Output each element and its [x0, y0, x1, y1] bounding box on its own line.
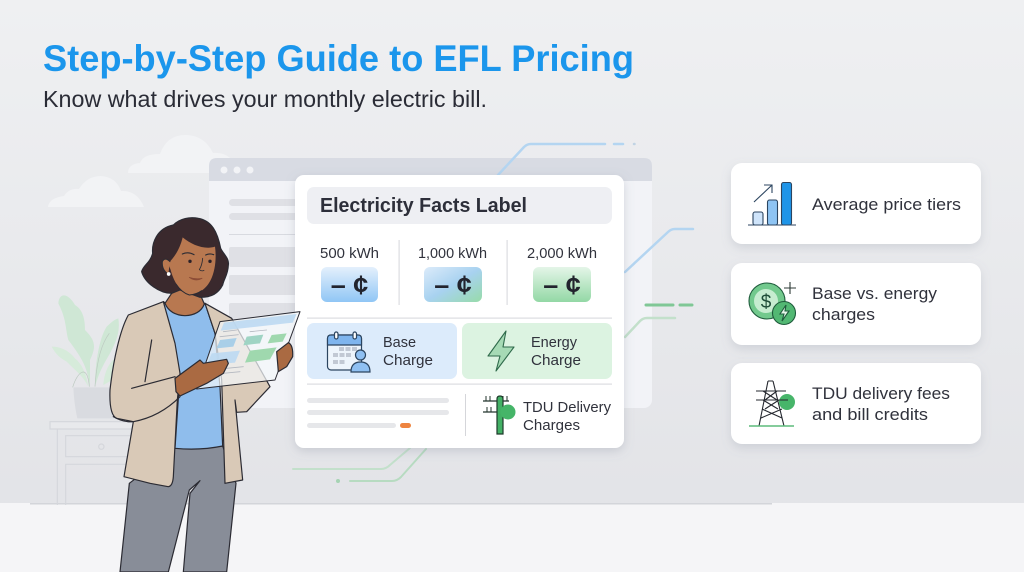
icon: coin with bolt: [749, 282, 796, 324]
tier: 1,000 kWh: 1,000 kWh: [418, 246, 487, 262]
tablet: [197, 312, 300, 389]
panel: Electricity Facts Label card: [295, 175, 624, 448]
placeholder lines: [307, 398, 449, 428]
tier: 2,000 kWh: – ¢: [543, 270, 581, 300]
person reading tablet: [110, 218, 300, 572]
icon: utility pole: [483, 396, 516, 434]
cardigan left: [110, 302, 180, 487]
icon: transmission tower: [749, 381, 795, 426]
card: TDU delivery fees and bill credits: [731, 363, 981, 444]
card: base vs energy charges: Base vs. energy: [812, 284, 938, 303]
TDU delivery charges: [483, 396, 612, 434]
tier: 1,000 kWh: [418, 246, 487, 302]
tier: 2,000 kWh: 2,000 kWh: [527, 246, 597, 262]
base charge box: Base: [383, 335, 416, 351]
icon: rising bars: [748, 182, 796, 225]
card: TDU delivery fees and bill credits: TDU delivery fees: [812, 384, 950, 403]
tier: 500 kWh: 500 kWh: [320, 246, 379, 262]
tier: 2,000 kWh: [527, 246, 597, 302]
clouds: [48, 135, 241, 207]
left hand: [175, 359, 228, 396]
card heading: Electricity Facts Label: [320, 195, 527, 217]
card heading: [307, 187, 612, 224]
ear and earring: [162, 259, 170, 274]
energy charge box: Energy: [531, 335, 578, 351]
card: average price tiers: [731, 163, 981, 244]
title: Step-by-Step Guide to EFL Pricing: [43, 38, 634, 79]
energy charge box: [462, 323, 612, 379]
tier: 500 kWh: [320, 246, 379, 302]
subtitle: Know what drives your monthly electric bill.: [43, 86, 487, 112]
base charge box: Charge: [383, 353, 433, 369]
card: TDU delivery fees and bill credits: and bill credits: [812, 405, 928, 424]
icon: lightning bolt: [488, 331, 514, 371]
plant on side table: [50, 295, 137, 505]
browser window: [209, 158, 652, 408]
neck: [165, 283, 204, 316]
card: base vs energy charges: [731, 263, 981, 345]
hair: [142, 218, 228, 297]
energy charge box: Charge: [531, 353, 581, 369]
shirt: [163, 302, 223, 449]
card: average price tiers: Average price tiers: [812, 195, 961, 214]
TDU delivery charges: TDU Delivery: [523, 400, 612, 416]
tier: 1,000 kWh: – ¢: [434, 270, 472, 300]
base charge box: [307, 323, 457, 379]
face: [168, 237, 216, 295]
eyes and mouth: [188, 260, 192, 263]
circuit lines: [293, 144, 693, 482]
tier: 500 kWh: – ¢: [331, 270, 368, 300]
pants: [120, 446, 236, 572]
icon: calendar with person: [328, 332, 370, 372]
cardigan right: [205, 303, 270, 483]
TDU delivery charges: Charges: [523, 418, 580, 434]
icon: coin with bolt: $: [761, 292, 772, 313]
card: base vs energy charges: charges: [812, 305, 875, 324]
right hand: [277, 343, 293, 372]
